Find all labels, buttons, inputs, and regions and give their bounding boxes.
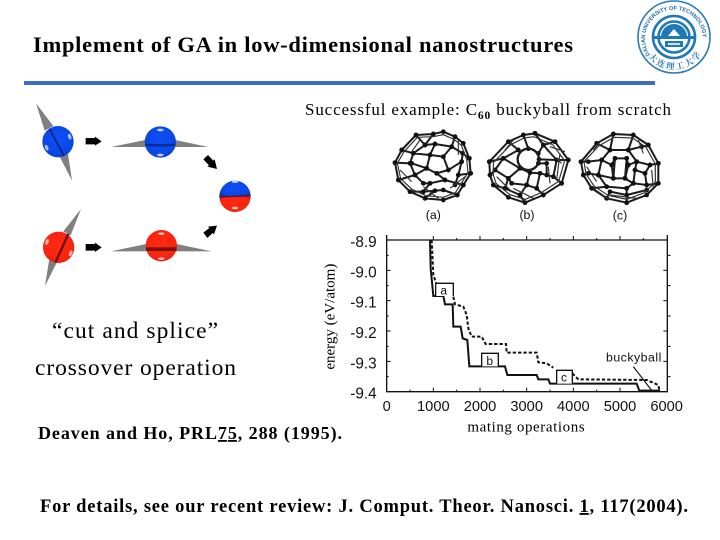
series: dotted — [432, 240, 659, 390]
y axis labels: -9.3 — [350, 355, 377, 372]
blue cluster tilted — [36, 103, 74, 181]
y axis title: energy (eV/atom) — [323, 264, 339, 370]
fullerene structures: (b) — [519, 208, 535, 222]
subtitle: successful example: 60 — [478, 110, 491, 122]
caption: crossover operation: crossover operation — [35, 355, 236, 381]
marker box b: b — [486, 354, 493, 368]
title rule — [24, 81, 655, 85]
logo: university seal: 大连理工大学 — [648, 52, 700, 70]
marker box b — [482, 353, 498, 368]
child cluster, half blue half red — [219, 180, 251, 212]
x axis labels: 1000 — [417, 399, 450, 415]
y axis labels: -9.4 — [350, 385, 377, 402]
x axis labels: 3000 — [510, 399, 543, 415]
caption: cut and splice: “cut and splice” — [52, 318, 218, 344]
x axis labels: 4000 — [557, 399, 590, 415]
fullerene a — [395, 132, 471, 200]
y axis labels: -9.2 — [350, 325, 377, 342]
marker box c — [557, 370, 572, 385]
title: Implement of GA in low-dimensional nanostructures — [33, 32, 573, 57]
buckyball callout — [606, 350, 661, 392]
reference note: For details, see our recent review: J. Comput. Theor. Nanosci. 1, 117(2004). — [40, 497, 688, 517]
x axis labels: 2000 — [464, 399, 496, 415]
arrow: up to child — [203, 226, 217, 238]
arrow: down to child — [203, 155, 217, 169]
arrow: bottom right — [86, 243, 102, 252]
x axis labels: 6000 — [650, 399, 683, 415]
fullerene b — [489, 133, 568, 203]
y axis labels: -9.0 — [350, 264, 377, 281]
marker box c: c — [561, 371, 567, 385]
subtitle: successful example: buckyball from scratch — [491, 100, 672, 119]
x axis labels: 0 — [383, 399, 391, 415]
y axis labels — [350, 234, 377, 402]
citation: Deaven and Ho: Deaven and Ho, PRL75, 288 (1995). — [38, 423, 342, 444]
blue cluster rotated — [111, 126, 208, 158]
x axis labels — [383, 399, 683, 415]
fullerene structures — [395, 132, 658, 222]
arrow: top right — [86, 137, 102, 146]
fullerene structures: (c) — [613, 208, 627, 222]
diagram: cut and splice spheres — [36, 103, 251, 286]
logo: university seal — [637, 0, 711, 74]
red cluster tilted — [43, 209, 81, 286]
y axis labels: -8.9 — [350, 234, 377, 251]
y axis labels: -9.1 — [350, 295, 377, 312]
red cluster rotated — [111, 230, 212, 261]
buckyball callout: buckyball — [606, 350, 661, 364]
subtitle: successful example: Successful example: C — [305, 100, 477, 119]
chart: energy vs mating operations — [323, 234, 683, 436]
x axis title: mating operations — [467, 420, 585, 436]
marker box a — [436, 283, 453, 298]
logo: university seal: DALIAN UNIVERSITY OF TECHNOLOGY — [641, 6, 707, 57]
labels a, b, c: (a) — [426, 208, 441, 222]
series: solid — [430, 240, 660, 391]
fullerene c — [581, 134, 658, 203]
x axis labels: 5000 — [604, 399, 636, 415]
marker box a: a — [440, 284, 447, 298]
plot frame — [387, 235, 667, 392]
